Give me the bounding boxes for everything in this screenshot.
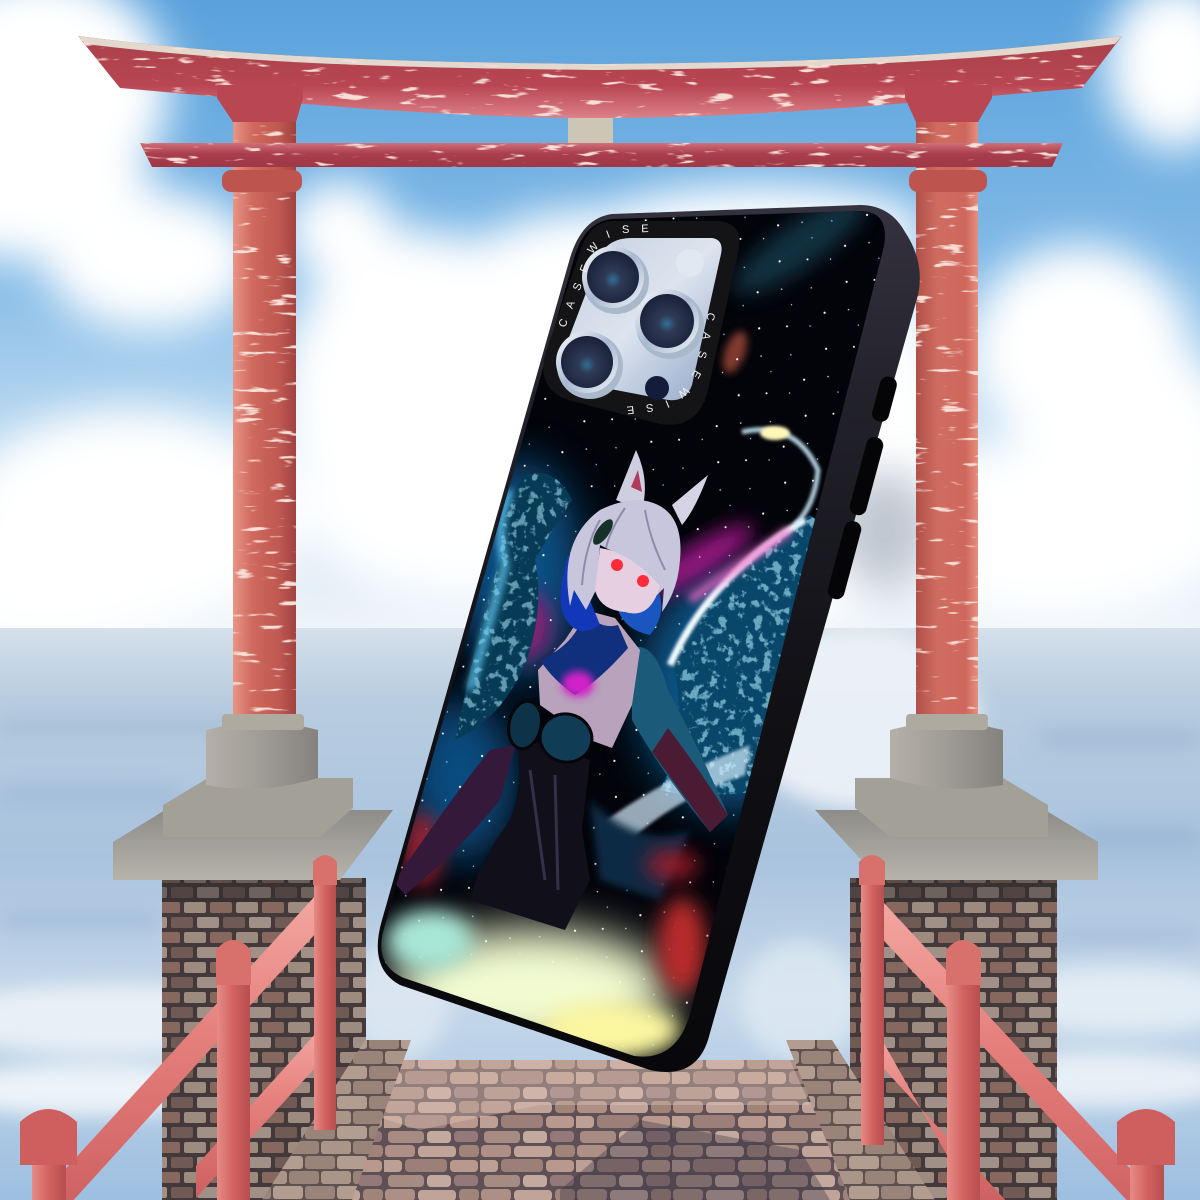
artwork: right wave [590, 426, 830, 900]
torii: centre strut [568, 104, 613, 144]
artwork: nebula glows [405, 181, 878, 860]
figure: hair ornament [593, 519, 613, 545]
right railing [859, 855, 1175, 1200]
case: flash [676, 249, 704, 277]
pedestal: upper block [206, 722, 318, 789]
pedestal: stone slab [113, 810, 393, 880]
figure: hair [561, 500, 680, 635]
artwork: yellow-green mist [386, 812, 706, 1058]
case: outer body [378, 205, 920, 1072]
artwork: anime figure [394, 450, 728, 930]
figure: ears [616, 450, 708, 525]
torii: top beam [78, 36, 1122, 118]
pedestal: middle block [855, 778, 1048, 837]
background: sea [0, 628, 1200, 1200]
torii: left pillar [222, 100, 302, 718]
torii: right pillar [909, 100, 987, 718]
case: lens top [582, 246, 649, 314]
figure: neck and chest skin [538, 610, 640, 748]
stone bridge path [262, 1040, 935, 1200]
figure: face [595, 548, 660, 614]
right stone pedestal [815, 714, 1098, 1200]
case: brand text lower: CASEWISE [626, 313, 715, 414]
artwork: star field [382, 214, 880, 1047]
figure: bust [507, 700, 594, 764]
figure: corset and skirt [470, 735, 590, 930]
figure: collar [540, 624, 628, 695]
torii gate [78, 36, 1122, 718]
case: brand text upper: CASEWISE [559, 224, 648, 326]
torii: pillar caps [217, 85, 992, 122]
case: camera surround [543, 221, 739, 425]
figure: arms [632, 647, 728, 832]
case: lens bottom [556, 331, 623, 399]
left stone pedestal [113, 714, 393, 1200]
pedestal: upper block [890, 722, 1003, 789]
case: sensor [645, 376, 669, 400]
pedestal: brick wall [162, 878, 366, 1200]
case: side buttons [826, 375, 899, 601]
pedestal: middle block [163, 778, 353, 837]
torii: lower beam [140, 143, 1063, 167]
figure: eyes [611, 559, 649, 587]
case: printed artwork [381, 211, 885, 1057]
artwork: left wave [455, 473, 572, 740]
left railing [20, 855, 337, 1200]
background: sky [0, 0, 1200, 628]
pedestal: brick wall [850, 878, 1057, 1200]
background: clouds [0, 0, 1200, 650]
pedestal: stone slab [815, 810, 1098, 880]
phone case [378, 205, 920, 1072]
case: lens right [635, 289, 704, 359]
case: camera plate [560, 238, 722, 400]
